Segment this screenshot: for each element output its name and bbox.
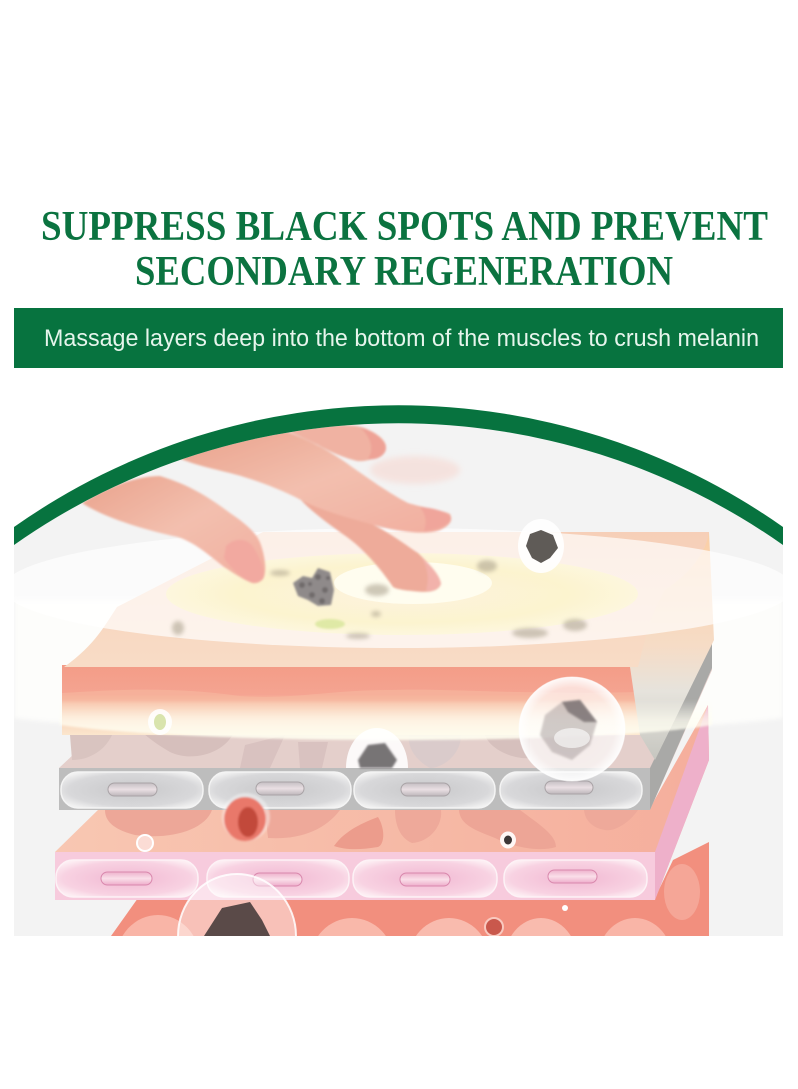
blurred motion finger	[370, 456, 460, 484]
pink dermis layer	[55, 705, 709, 900]
central white ring	[334, 562, 492, 604]
small dark bubble	[500, 832, 516, 848]
index finger	[82, 476, 265, 583]
faint black spots on skin	[172, 560, 587, 639]
small pale bubble	[137, 835, 153, 851]
bottom muscle layer	[111, 842, 709, 936]
rear finger	[286, 425, 386, 461]
nail on pointing finger	[424, 560, 440, 591]
small green bubble	[148, 709, 172, 735]
bubble: dark melanin in muscle layer	[177, 873, 297, 936]
epidermis top surface	[64, 532, 709, 667]
title	[41, 204, 768, 295]
middle finger	[179, 431, 451, 533]
green patch on skin	[315, 619, 345, 629]
bubble: surface melanin	[518, 519, 564, 573]
subtitle banner: Massage layers deep into the bottom of the muscles to crush melanin	[44, 325, 759, 352]
white halo behind skin block	[16, 604, 781, 722]
grey cells	[61, 772, 642, 808]
nail on middle finger	[422, 507, 450, 530]
title: SECONDARY REGENERATION	[135, 249, 673, 295]
panel: skin layers illustration	[14, 424, 783, 936]
infographic canvas	[14, 212, 783, 936]
pink cells	[56, 860, 647, 897]
pointing finger	[301, 500, 441, 592]
hand massaging skin	[82, 425, 460, 592]
bubble: speckled melanin in grey layer	[346, 728, 408, 768]
small red spot	[485, 918, 503, 936]
massage glow ellipse	[103, 532, 714, 648]
concentric yellow treatment ring	[166, 553, 638, 635]
green arc	[14, 405, 783, 545]
white dot	[562, 905, 568, 911]
bubble: large broken melanin	[519, 677, 625, 781]
speckled melanin spot	[293, 568, 334, 606]
pink cell nuclei	[101, 870, 597, 886]
grey basal layer	[59, 640, 712, 810]
red melanin cluster	[222, 793, 270, 841]
nail on rear finger	[360, 427, 386, 459]
lower wash over epidermis	[60, 700, 712, 740]
epidermis front and side faces	[62, 532, 714, 760]
grey cell nuclei	[108, 781, 593, 796]
fingernail	[224, 540, 260, 577]
subtitle banner	[14, 308, 783, 368]
